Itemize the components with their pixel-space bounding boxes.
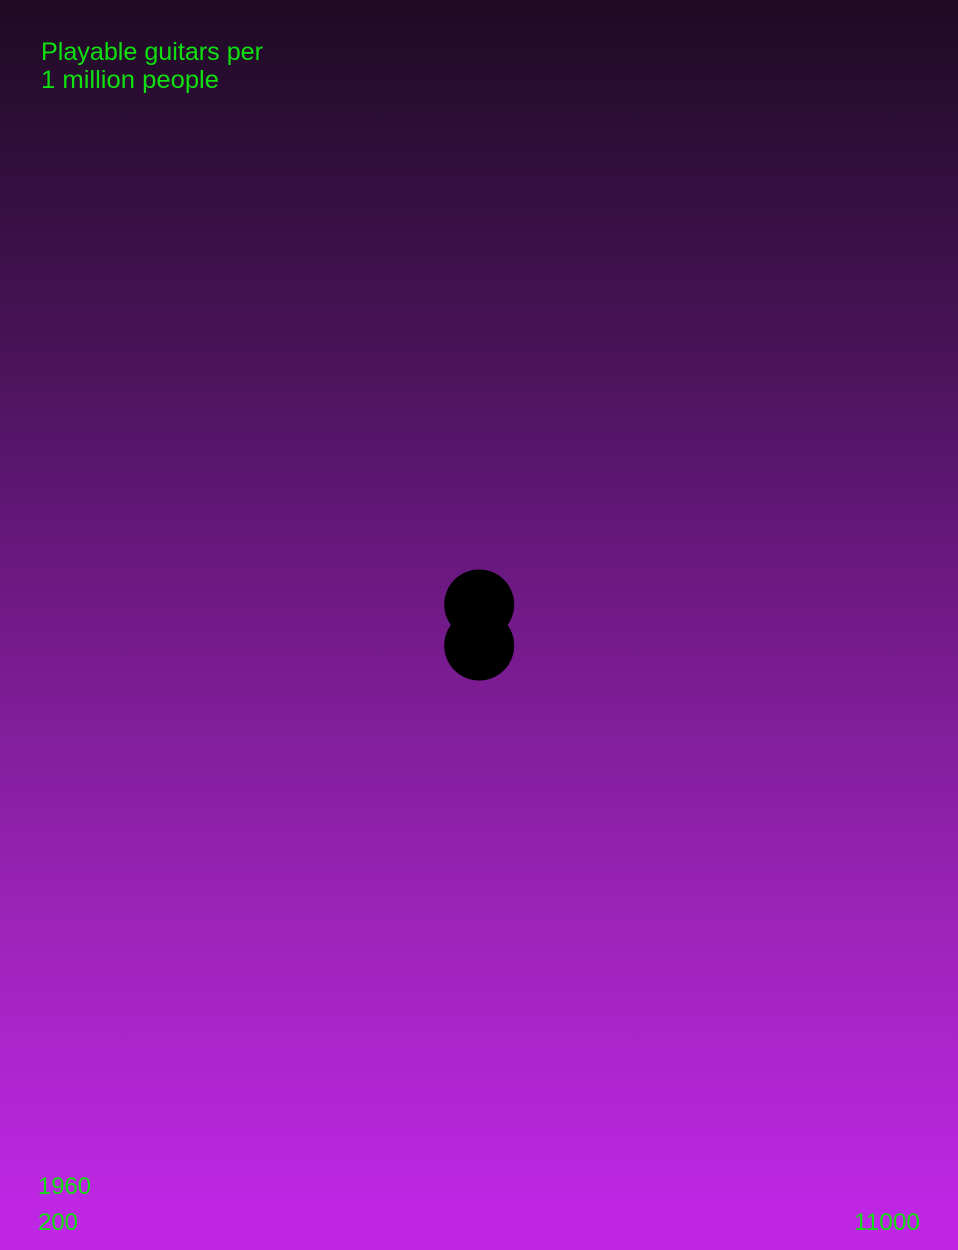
label: axis maximum: 11000	[854, 1209, 920, 1236]
label: year: 1960	[38, 1173, 91, 1200]
title: 1 million people	[41, 66, 219, 94]
title	[41, 38, 263, 94]
data dots: two overlapping black circles	[444, 570, 514, 680]
title: Playable guitars per	[41, 38, 263, 66]
label: axis minimum: 200	[38, 1209, 78, 1236]
